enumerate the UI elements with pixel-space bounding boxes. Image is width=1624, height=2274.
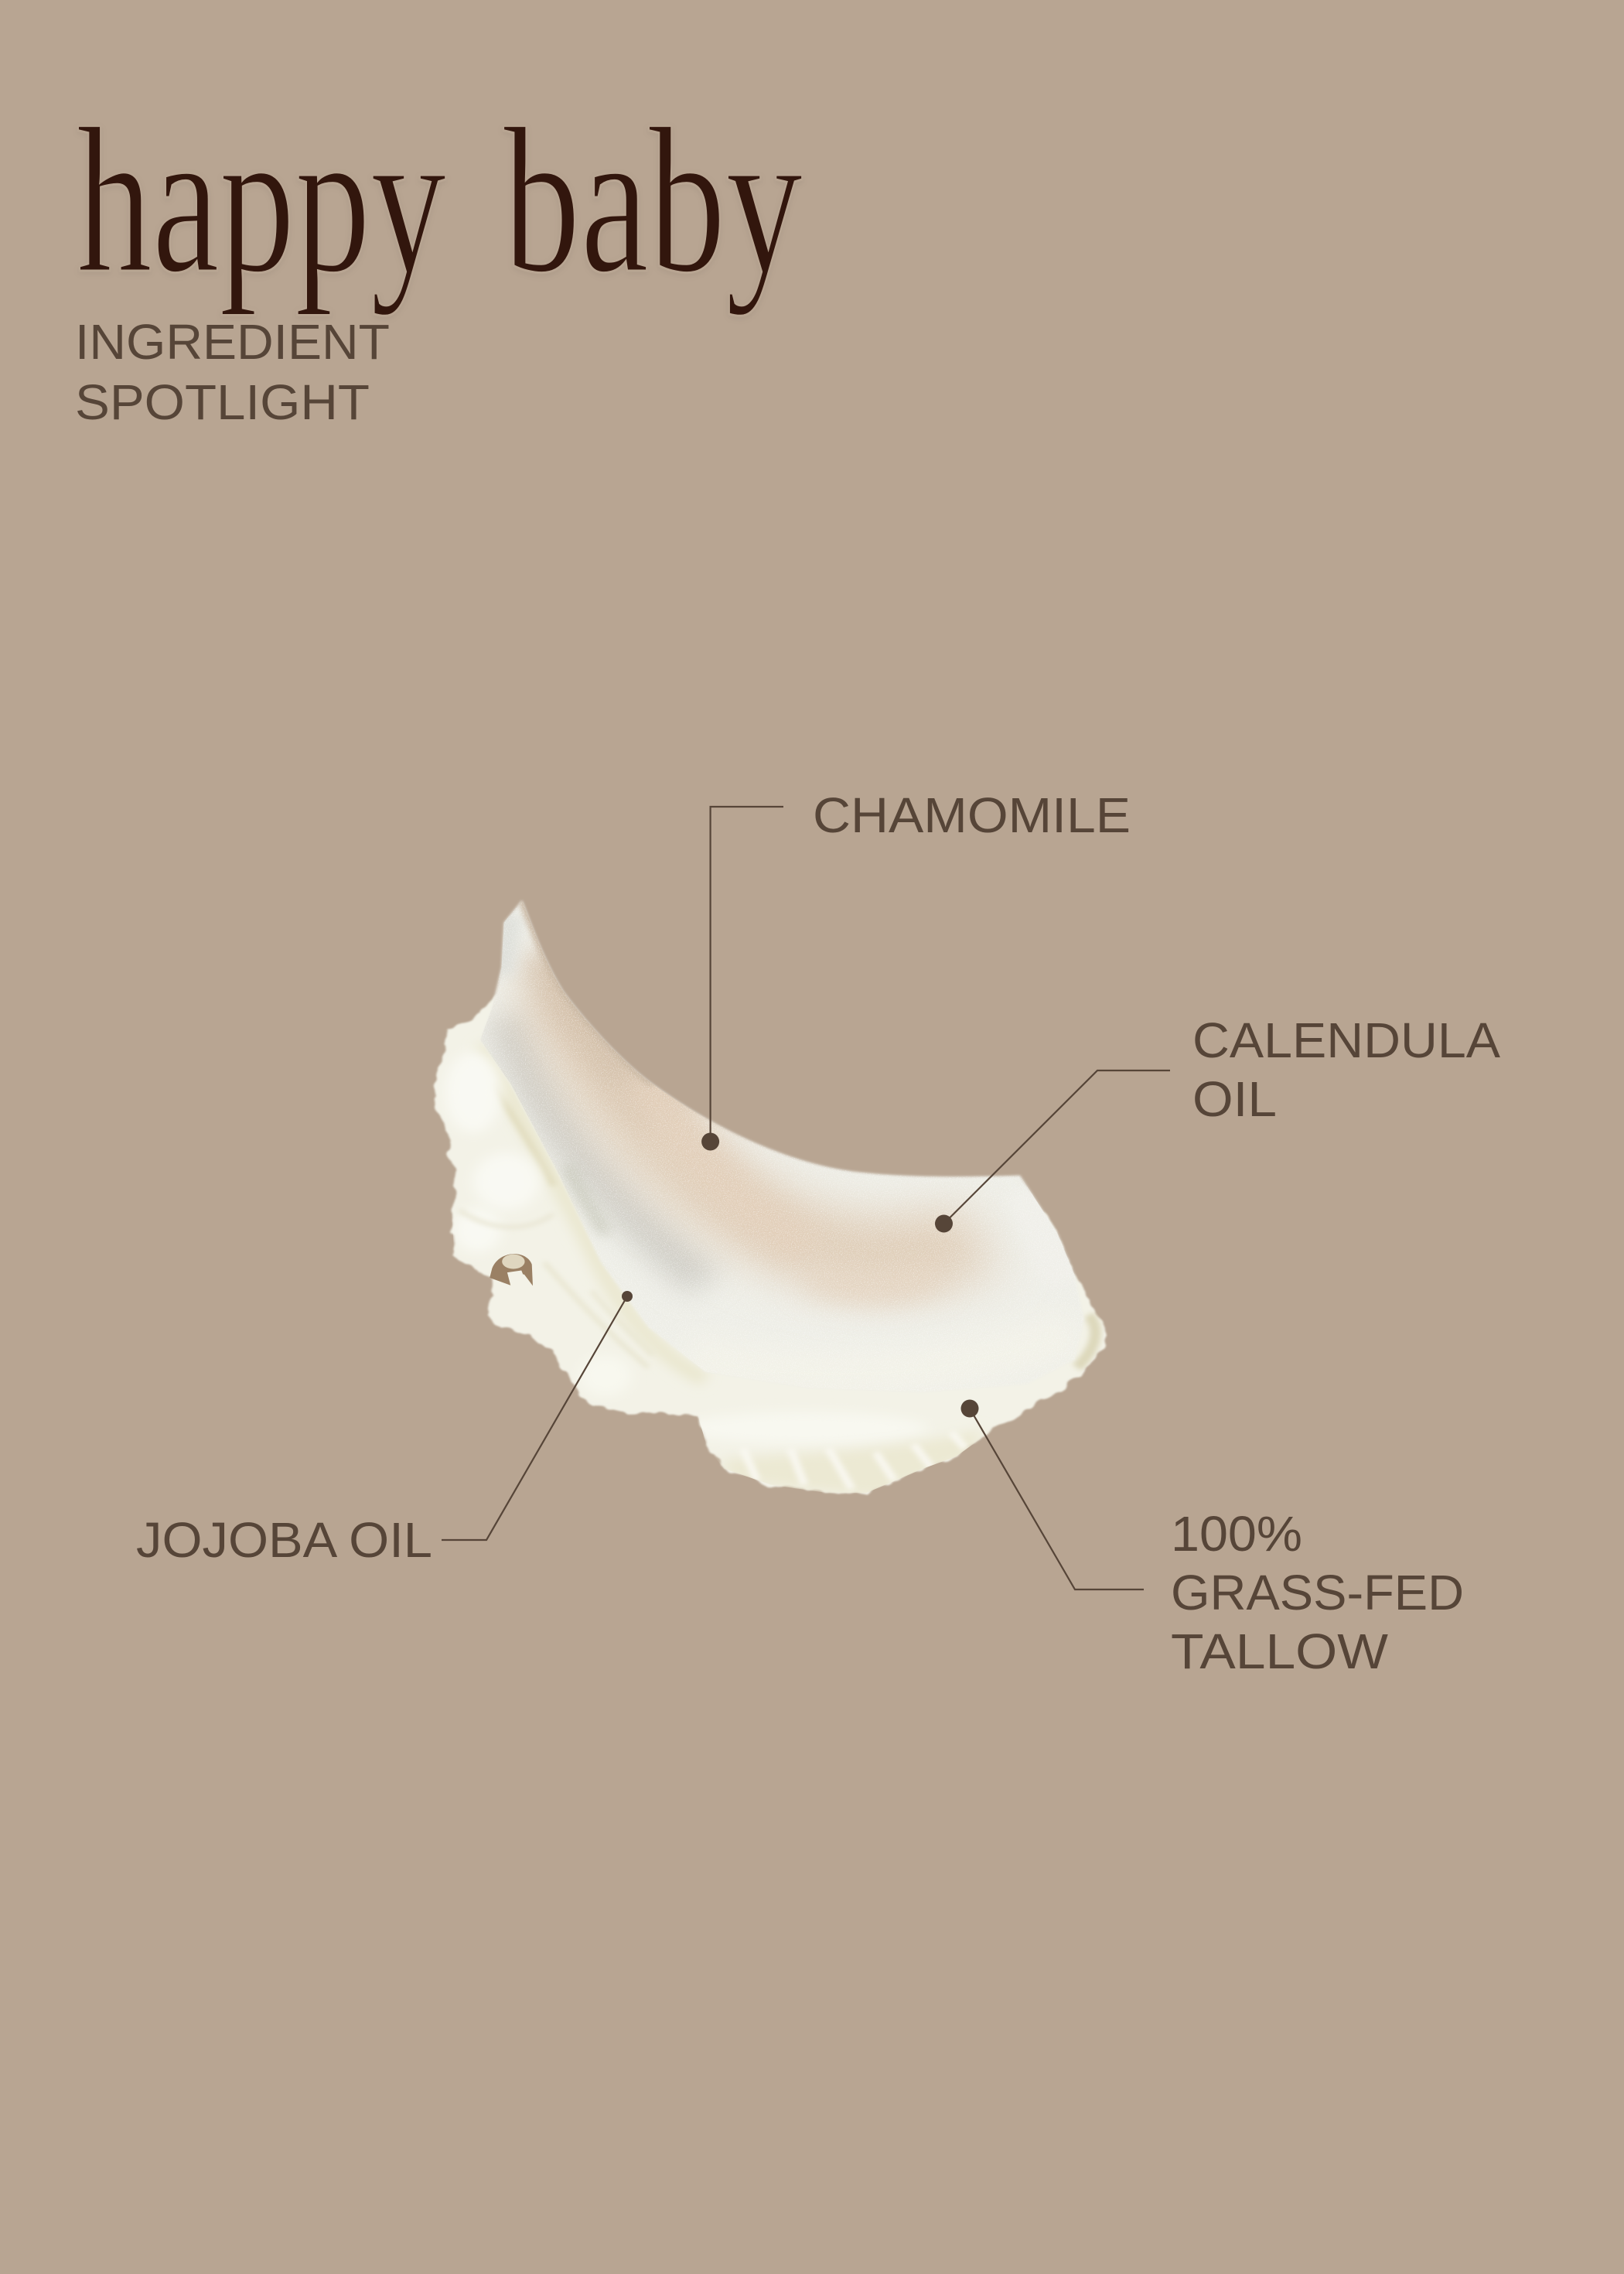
callout: 100% grass-fed tallow	[960, 1400, 1464, 1679]
label: GRASS-FED	[1171, 1565, 1464, 1620]
lumpy rim of the balm	[433, 987, 1105, 1493]
label: CALENDULA	[1192, 1012, 1500, 1068]
marker dot	[701, 1132, 719, 1151]
rim shading	[445, 1044, 1096, 1497]
leader line	[943, 1070, 1170, 1224]
label: OIL	[1192, 1071, 1277, 1127]
label: JOJOBA OIL	[136, 1512, 432, 1568]
subtitle: ingredient spotlight: SPOTLIGHT	[75, 374, 370, 430]
callout: chamomile	[701, 787, 1131, 1151]
smoothed centre with tan blush	[480, 900, 1084, 1391]
leader line	[970, 1408, 1144, 1589]
subtitle: ingredient spotlight: INGREDIENT	[75, 314, 390, 370]
marker dot	[960, 1400, 979, 1417]
title: happy baby: happy	[77, 85, 446, 316]
label: TALLOW	[1171, 1624, 1389, 1679]
label: CHAMOMILE	[813, 787, 1131, 843]
product swatch: tallow balm smear	[433, 898, 1105, 1497]
marker dot	[622, 1291, 633, 1302]
marker dot	[935, 1214, 953, 1233]
label: 100%	[1171, 1506, 1302, 1562]
callout: calendula oil	[935, 1012, 1500, 1233]
label	[1171, 1506, 1464, 1679]
leader line	[442, 1296, 627, 1540]
title: happy baby: baby	[503, 85, 803, 316]
notch showing background	[490, 1254, 533, 1291]
label	[1192, 1012, 1500, 1127]
leader line	[711, 807, 783, 1142]
subtitle: ingredient spotlight	[75, 314, 390, 430]
callout: jojoba oil	[136, 1291, 633, 1568]
